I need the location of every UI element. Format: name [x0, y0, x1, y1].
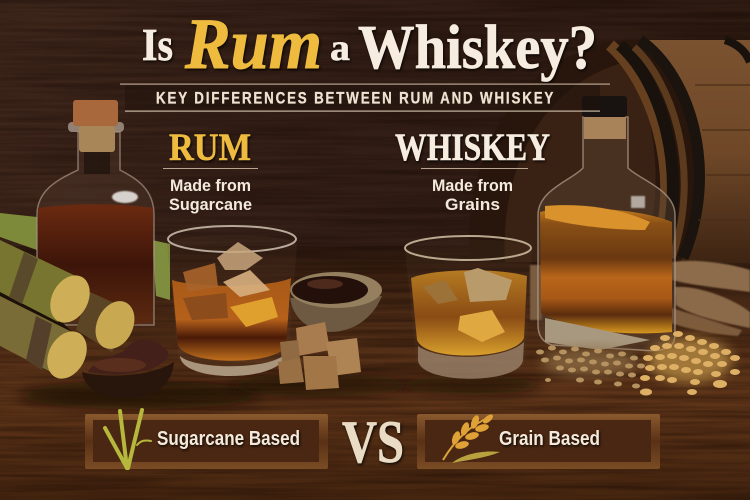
scattered grains: [536, 331, 740, 396]
subtitle band: KEY DIFFERENCES BETWEEN RUM AND WHISKEY: [156, 90, 553, 108]
title: Whiskey?: [358, 14, 597, 82]
burlap sack: [530, 261, 750, 336]
title: Rum: [184, 4, 322, 84]
rum heading: Sugarcane: [169, 196, 252, 214]
whiskey heading: [395, 126, 550, 214]
brown sugar cubes: [278, 322, 361, 390]
whiskey glass: [405, 236, 532, 379]
whiskey ice cubes: [423, 268, 512, 342]
sugarcane behind bottle: [0, 213, 170, 300]
rum bottle: [37, 100, 154, 326]
rum heading: [163, 126, 258, 214]
title: [142, 4, 597, 84]
vs label: VS: [342, 409, 404, 475]
subtitle band: [120, 84, 610, 112]
icon: wheat: [443, 413, 500, 463]
panel: sugarcane based plaque: Sugarcane Based: [157, 428, 300, 450]
panel: sugarcane based plaque: [85, 410, 328, 469]
rum glass: [167, 226, 297, 376]
whiskey heading: Grains: [445, 196, 500, 214]
whiskey heading: Made from: [432, 177, 513, 195]
title: Is: [142, 19, 173, 70]
small bowl of dark sugar: [82, 339, 174, 398]
panel: grain based plaque: Grain Based: [499, 428, 600, 450]
rum heading: RUM: [169, 126, 251, 169]
rum heading: Made from: [170, 177, 251, 195]
barrel: [469, 38, 750, 263]
whiskey heading: WHISKEY: [395, 126, 550, 169]
title: a: [330, 27, 350, 69]
rum ice cubes: [183, 242, 278, 327]
whiskey bottle: [538, 96, 675, 351]
sugarcane pieces: [0, 240, 142, 386]
bowl of molasses: [290, 272, 382, 332]
panel: grain based plaque: [417, 413, 660, 469]
icon: sugarcane: [105, 410, 151, 468]
